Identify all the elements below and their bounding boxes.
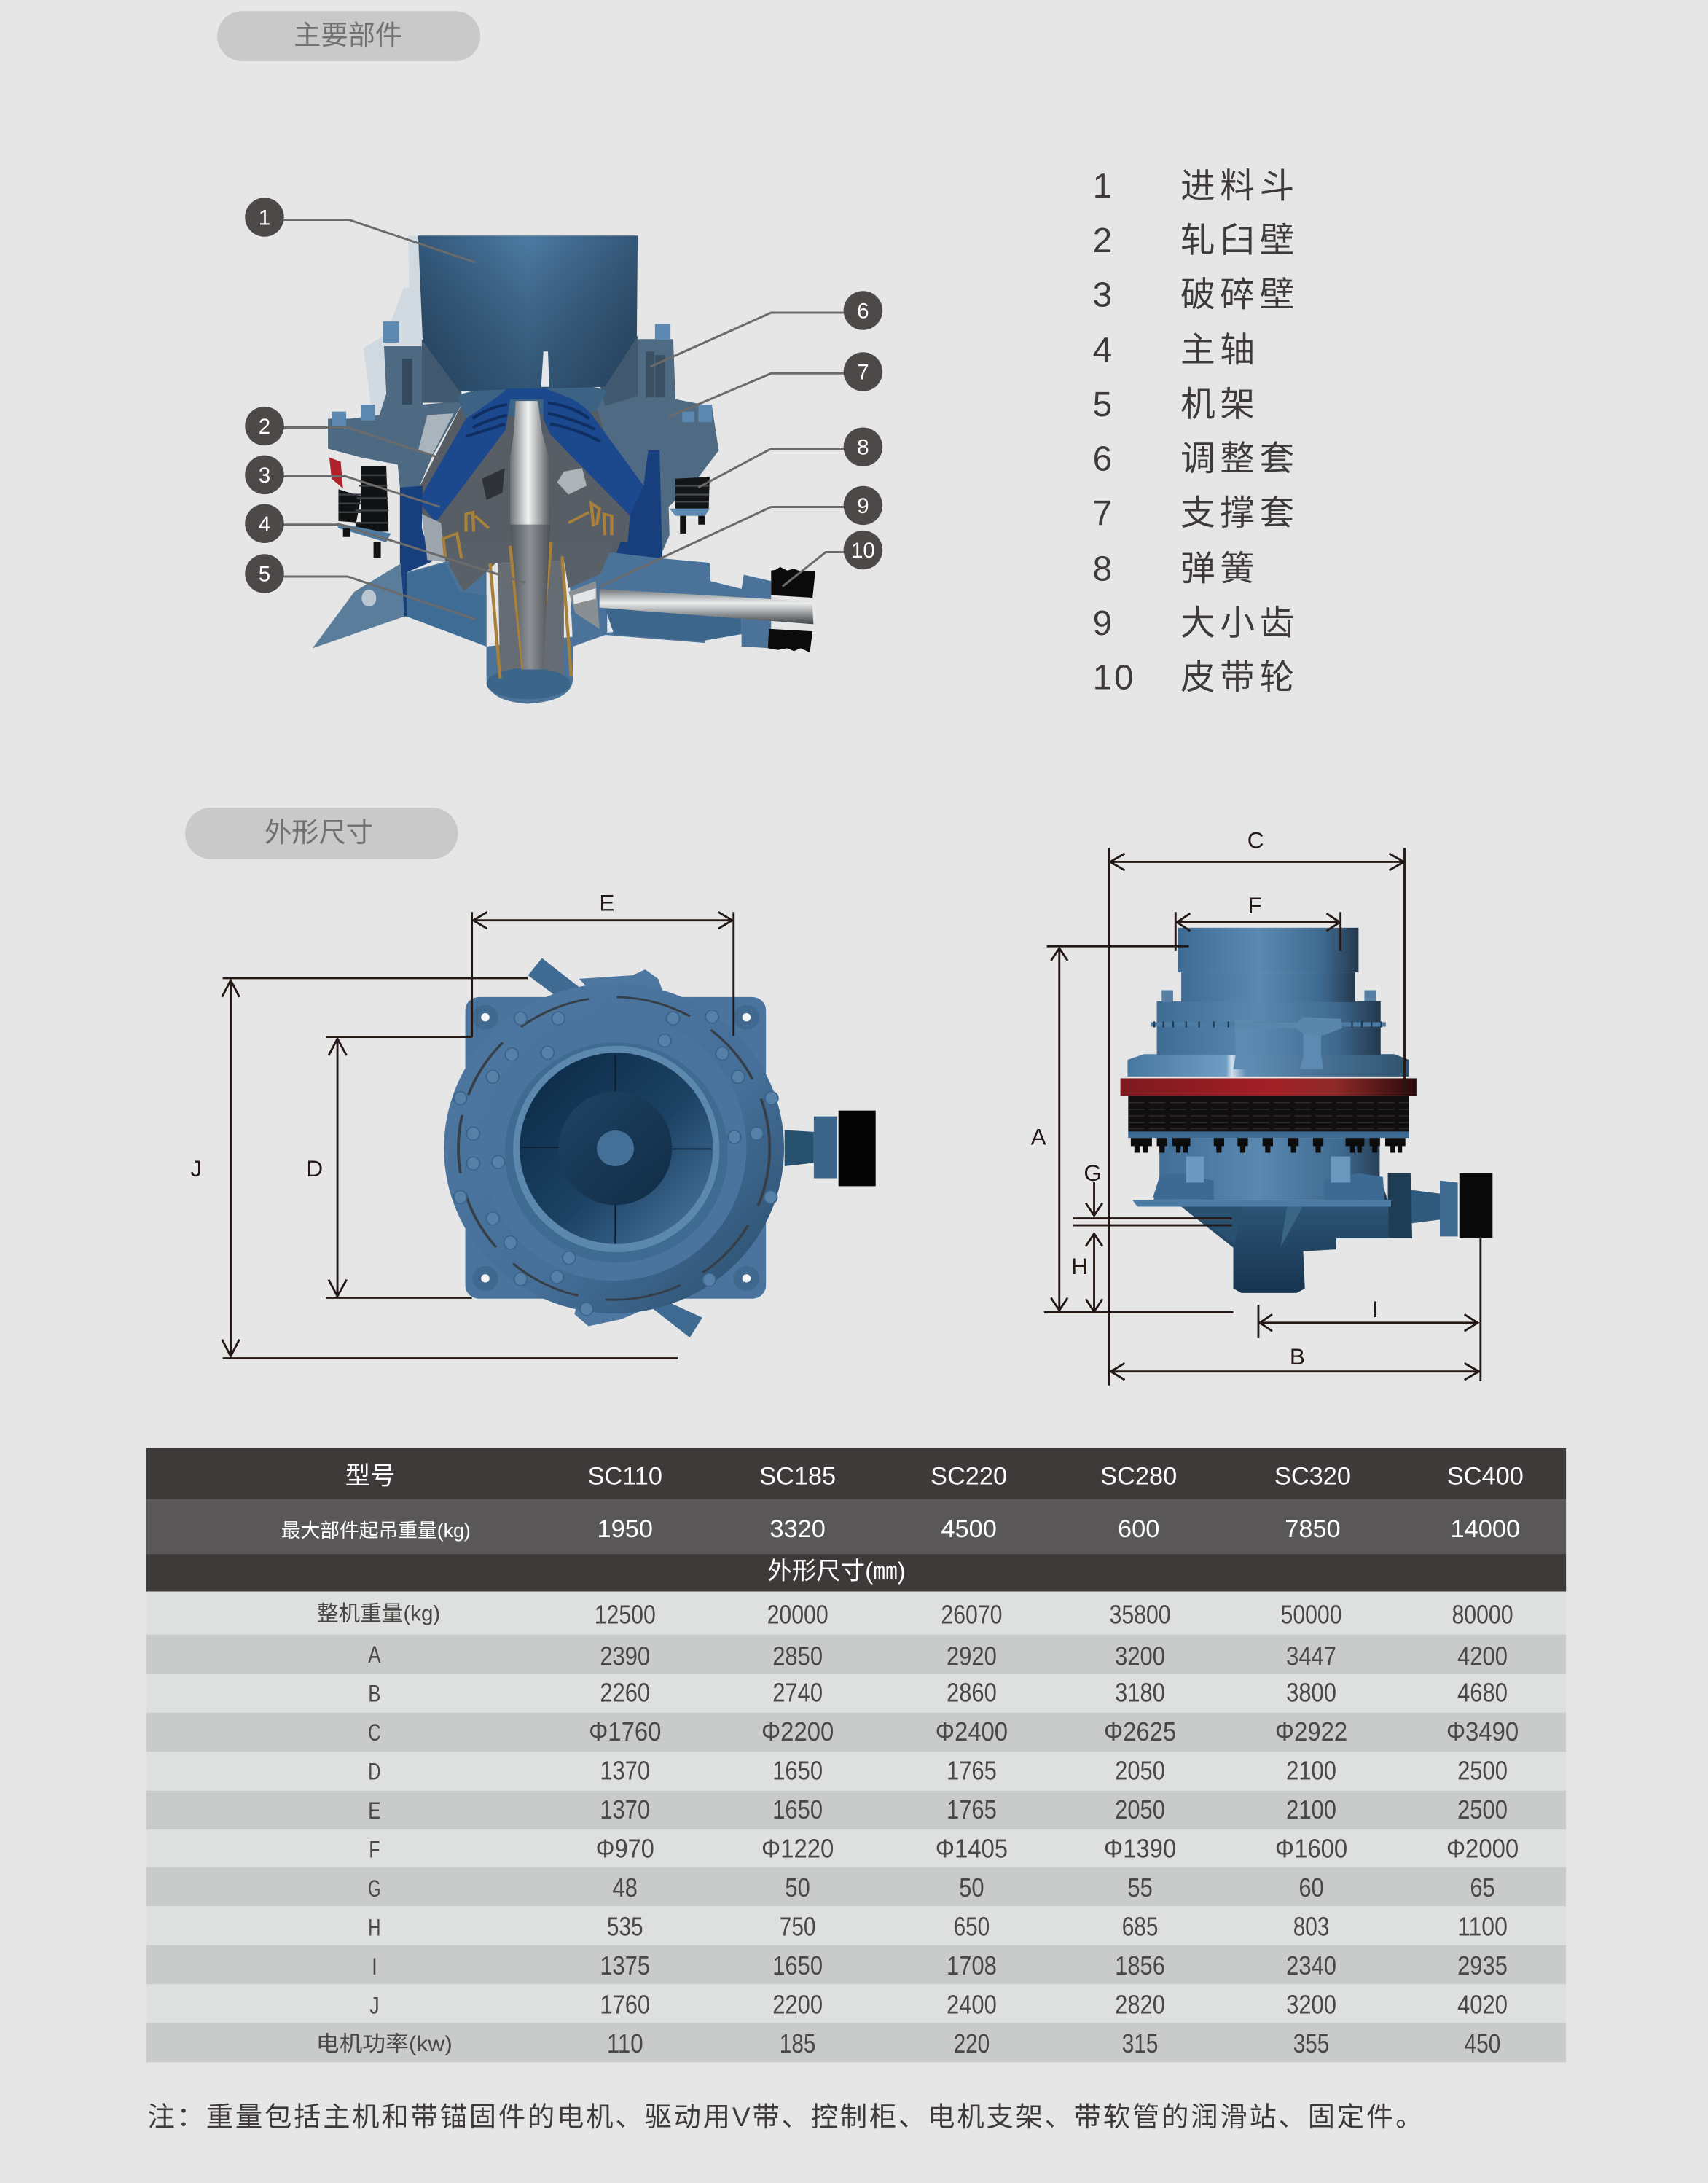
numbered callouts: 2: [259, 415, 270, 439]
row: dimensions subheader: 外形尺寸(㎜): [767, 1558, 906, 1585]
row: H: 1100: [1457, 1911, 1508, 1941]
upper flange: [1127, 1054, 1409, 1077]
row: F: Φ2000: [1446, 1833, 1519, 1863]
row: G: 60: [1298, 1872, 1324, 1902]
component legend list: 大小齿: [1180, 604, 1299, 643]
component legend list: 7: [1093, 494, 1114, 533]
component legend list: 破碎壁: [1180, 276, 1299, 314]
right spring: [675, 477, 710, 509]
row: total weight: [146, 1591, 1566, 1635]
row: max lifting weight: 3320: [769, 1515, 826, 1543]
hydraulic cylinders: [1234, 1020, 1323, 1069]
side view crusher: [1121, 928, 1492, 1293]
row: total weight: 12500: [595, 1599, 656, 1629]
row: H: [146, 1906, 1566, 1945]
row: E: 2500: [1457, 1795, 1508, 1824]
dimension J: J: [190, 1155, 202, 1182]
row: I: 2340: [1286, 1950, 1336, 1980]
dimension A: A: [1031, 1123, 1046, 1149]
numbered callouts: 8: [857, 436, 869, 460]
row: B: [146, 1674, 1566, 1713]
row: C: C: [368, 1719, 380, 1746]
bolts: [454, 1010, 778, 1316]
row: E: 2050: [1115, 1795, 1165, 1824]
row: total weight: 20000: [767, 1599, 828, 1629]
pinion gear: [568, 581, 600, 629]
component legend list: 皮带轮: [1180, 659, 1299, 698]
row: C: Φ1760: [589, 1717, 661, 1746]
row: G: 50: [785, 1872, 810, 1902]
component legend list: 4: [1093, 332, 1114, 370]
header row: model: SC110: [587, 1462, 662, 1490]
bowl ring behind head: [457, 382, 607, 418]
row: G: 55: [1127, 1872, 1153, 1902]
lower body: [1153, 1138, 1388, 1200]
spring plate: [1128, 1131, 1409, 1138]
pulley: [839, 1111, 876, 1186]
hub: [597, 1130, 634, 1166]
dimension F: F: [1248, 892, 1262, 918]
dimension C: [1109, 827, 1405, 1386]
row: I: 1375: [600, 1950, 650, 1980]
header row: model: SC220: [931, 1462, 1007, 1490]
component legend list: 5: [1093, 386, 1114, 424]
pulley: [768, 567, 815, 652]
row: J: 4020: [1457, 1989, 1508, 2019]
header row: model: SC185: [759, 1462, 836, 1490]
row: motor power: 电机功率(kw): [316, 2032, 453, 2056]
row: F: Φ1405: [936, 1833, 1008, 1863]
row: A: 4200: [1457, 1641, 1508, 1671]
row: I: I: [372, 1953, 377, 1980]
dimension C: C: [1247, 827, 1264, 853]
outer body: [444, 983, 784, 1313]
dimension D: [306, 1037, 472, 1297]
row: motor power: 185: [780, 2028, 815, 2058]
row: J: 3200: [1286, 1989, 1336, 2019]
dimension J: [190, 978, 678, 1359]
numbered callouts: 6: [857, 300, 869, 324]
hopper side plates: [422, 335, 638, 406]
red clamp ring: [1121, 1078, 1417, 1096]
header row: model: SC280: [1100, 1462, 1177, 1490]
row: H: H: [368, 1914, 380, 1940]
bowl lip: [513, 1046, 719, 1252]
lugs: [574, 969, 667, 1326]
row: motor power: 110: [607, 2028, 643, 2058]
component legend list: [1093, 167, 1299, 698]
row: J: 2200: [772, 1989, 823, 2019]
row: E: 2100: [1286, 1795, 1336, 1824]
row: D: D: [368, 1758, 380, 1784]
drive shaft and flange: [1411, 1190, 1440, 1223]
row: J: 2400: [947, 1989, 997, 2019]
row: max lifting weight: 4500: [941, 1515, 997, 1543]
row: total weight: 整机重量(kg): [317, 1602, 440, 1626]
component legend list: 1: [1093, 167, 1114, 206]
lower-left frame column: [400, 485, 432, 617]
leader lines: [265, 219, 862, 620]
row: dimensions subheader: [146, 1554, 1566, 1591]
row: total weight: 35800: [1110, 1599, 1171, 1629]
left springs: [338, 466, 388, 531]
component legend list: 9: [1093, 604, 1114, 643]
pinion housing backing: [568, 542, 607, 647]
row: motor power: [146, 2023, 1566, 2062]
component legend list: 调整套: [1180, 440, 1299, 479]
dimension I: I: [1372, 1296, 1379, 1322]
row: H: 685: [1122, 1911, 1158, 1941]
row: E: 1370: [600, 1795, 650, 1824]
row: C: Φ3490: [1446, 1717, 1519, 1746]
row: F: Φ1390: [1104, 1833, 1176, 1863]
heading: main components: 主要部件: [294, 20, 402, 50]
row: G: [146, 1867, 1566, 1906]
component legend list: 6: [1093, 440, 1114, 479]
top view dimension lines: [190, 889, 734, 1359]
dimension I: [1258, 1296, 1478, 1338]
row: B: 2260: [600, 1677, 650, 1707]
row: A: 3447: [1286, 1641, 1336, 1671]
row: A: 2850: [772, 1641, 823, 1671]
left upper frame: [328, 346, 463, 489]
lower cone and column: [1181, 1207, 1388, 1293]
dimension B: B: [1290, 1343, 1305, 1370]
row: total weight: 50000: [1281, 1599, 1342, 1629]
row: H: 803: [1293, 1911, 1329, 1941]
side view dimension lines: [1031, 827, 1481, 1386]
numbered callouts: 1: [259, 206, 270, 230]
numbered callouts: 7: [857, 361, 869, 385]
row: C: Φ2200: [761, 1717, 834, 1746]
middle ring: [482, 1014, 746, 1281]
hopper: [418, 235, 638, 391]
row: motor power: 220: [954, 2028, 990, 2058]
adjustment ring: [1157, 1001, 1381, 1055]
numbered callouts: 9: [857, 494, 869, 518]
numbered callouts: [245, 198, 882, 593]
component legend list: 支撑套: [1180, 494, 1299, 533]
mounting foot: [313, 563, 404, 648]
row: D: 2050: [1115, 1755, 1165, 1785]
horizontal drive shaft: [600, 589, 813, 624]
cutaway crusher illustration: [265, 219, 862, 703]
row: C: Φ2625: [1104, 1717, 1176, 1746]
base cap: [487, 668, 571, 699]
component legend list: 机架: [1180, 386, 1259, 424]
row: F: Φ1220: [761, 1833, 834, 1863]
row: D: 2100: [1286, 1755, 1336, 1785]
interior backing: [418, 401, 630, 562]
numbered callouts: 10: [851, 539, 875, 563]
dimension F: [1175, 892, 1341, 951]
component legend list: 3: [1093, 276, 1114, 314]
bolts row: [1131, 1138, 1406, 1153]
bolts: [332, 321, 712, 429]
row: F: F: [369, 1836, 380, 1862]
row: B: 2860: [947, 1677, 997, 1707]
base flange: [1132, 1200, 1391, 1207]
dimension G: [1073, 1160, 1232, 1225]
top view crusher: [444, 958, 876, 1337]
row: F: [146, 1829, 1566, 1867]
row: B: 3180: [1115, 1677, 1165, 1707]
corner holes: [472, 1005, 759, 1291]
hopper left highlight and dome: [364, 235, 423, 422]
main shaft upper: [510, 401, 550, 525]
component legend list: 进料斗: [1180, 167, 1299, 206]
inner cone: [559, 1092, 672, 1205]
row: H: 650: [954, 1911, 990, 1941]
numbered callouts: 3: [259, 464, 270, 488]
row: B: 3800: [1286, 1677, 1336, 1707]
row: J: 2820: [1115, 1989, 1165, 2019]
ring teeth band: [1151, 1022, 1386, 1027]
springs: [1128, 1096, 1409, 1131]
ribs: [521, 1055, 712, 1243]
pulley: [1460, 1173, 1492, 1238]
row: A: 2920: [947, 1641, 997, 1671]
row: C: Φ2400: [936, 1717, 1008, 1746]
row: E: 1765: [947, 1795, 997, 1824]
lower frame body: [407, 551, 771, 703]
row: motor power: 450: [1465, 2028, 1500, 2058]
heading: outline dimensions: 外形尺寸: [265, 817, 373, 848]
row: total weight: 80000: [1452, 1599, 1513, 1629]
base plate: [466, 997, 766, 1299]
header row: model: [146, 1448, 1566, 1499]
component legend list: 轧臼壁: [1180, 222, 1299, 260]
row: G: 50: [959, 1872, 984, 1902]
right upper frame: [591, 339, 718, 558]
row: I: [146, 1945, 1566, 1984]
row: D: 2500: [1457, 1755, 1508, 1785]
component legend list: 8: [1093, 550, 1114, 589]
component legend list: 10: [1093, 659, 1135, 698]
dimension E: E: [599, 889, 614, 915]
numbered callouts: 4: [259, 512, 270, 536]
row: C: Φ2922: [1275, 1717, 1347, 1746]
top bolts: [1161, 991, 1376, 1002]
row: max lifting weight: 14000: [1451, 1515, 1520, 1543]
row: B: 2740: [772, 1677, 823, 1707]
heading: outline dimensions: [185, 808, 458, 859]
hopper bowl: [520, 1053, 713, 1244]
specification table: [146, 1448, 1566, 2062]
row: max lifting weight: [146, 1499, 1566, 1554]
row: max lifting weight: 最大部件起吊重量(kg): [281, 1520, 471, 1542]
crushing cone: [434, 430, 630, 542]
upper hopper cylinders: [1181, 972, 1355, 1002]
row: max lifting weight: 600: [1118, 1515, 1159, 1543]
row: F: Φ970: [596, 1833, 654, 1863]
eccentric and inner hub: [445, 542, 614, 592]
component legend list: 弹簧: [1180, 550, 1259, 589]
dimension H: [1071, 1234, 1102, 1312]
header row: model: 型号: [345, 1462, 396, 1490]
row: A: [146, 1635, 1566, 1674]
row: I: 1650: [772, 1950, 823, 1980]
gearbox lower: [605, 608, 742, 641]
row: G: G: [368, 1875, 380, 1902]
row: H: 535: [607, 1911, 643, 1941]
dimension B: [1110, 1236, 1481, 1381]
row: A: 3200: [1115, 1641, 1165, 1671]
footnote: 注：重量包括主机和带锚固件的电机、驱动用V带、控制柜、电机支架、带软管的润滑站、固定件。: [148, 2101, 1425, 2132]
row: I: 2935: [1457, 1950, 1508, 1980]
component legend list: 2: [1093, 222, 1114, 260]
row: J: [146, 1984, 1566, 2023]
mantle and bowl dark blue: [418, 388, 643, 523]
row: C: [146, 1713, 1566, 1752]
dimension D: D: [306, 1155, 323, 1182]
row: G: 65: [1470, 1872, 1495, 1902]
dimension A: [1031, 946, 1234, 1312]
bronze bushings thin lines: [443, 504, 611, 679]
row: B: B: [368, 1680, 380, 1706]
row: D: 1765: [947, 1755, 997, 1785]
row: G: 48: [613, 1872, 638, 1902]
row: D: [146, 1752, 1566, 1791]
row: A: 2390: [600, 1641, 650, 1671]
numbered callouts: 5: [259, 563, 270, 587]
row: max lifting weight: 1950: [598, 1515, 653, 1543]
row: D: 1370: [600, 1755, 650, 1785]
adjustment cylinders: [528, 958, 702, 1337]
row: I: 1856: [1115, 1950, 1165, 1980]
row: E: E: [368, 1797, 380, 1824]
row: J: 1760: [600, 1989, 650, 2019]
row: B: 4680: [1457, 1677, 1508, 1707]
component legend list: 主轴: [1180, 332, 1259, 370]
dimension H: H: [1071, 1253, 1088, 1279]
heading: main components: [217, 11, 480, 61]
dimension E: [472, 889, 734, 1037]
row: motor power: 315: [1122, 2028, 1158, 2058]
dimension G: G: [1084, 1160, 1102, 1186]
row: motor power: 355: [1293, 2028, 1329, 2058]
header row: model: SC320: [1274, 1462, 1351, 1490]
row: H: 750: [780, 1911, 815, 1941]
row: E: 1650: [772, 1795, 823, 1824]
row: A: A: [368, 1641, 381, 1668]
row: D: 1650: [772, 1755, 823, 1785]
row: I: 1708: [947, 1950, 997, 1980]
row: E: [146, 1791, 1566, 1829]
header row: model: SC400: [1447, 1462, 1524, 1490]
row: max lifting weight: 7850: [1285, 1515, 1341, 1543]
main shaft lower: [510, 525, 550, 669]
row: total weight: 26070: [941, 1599, 1002, 1629]
row: J: J: [369, 1992, 380, 2018]
drive flange: [785, 1130, 814, 1166]
row: F: Φ1600: [1275, 1833, 1347, 1863]
